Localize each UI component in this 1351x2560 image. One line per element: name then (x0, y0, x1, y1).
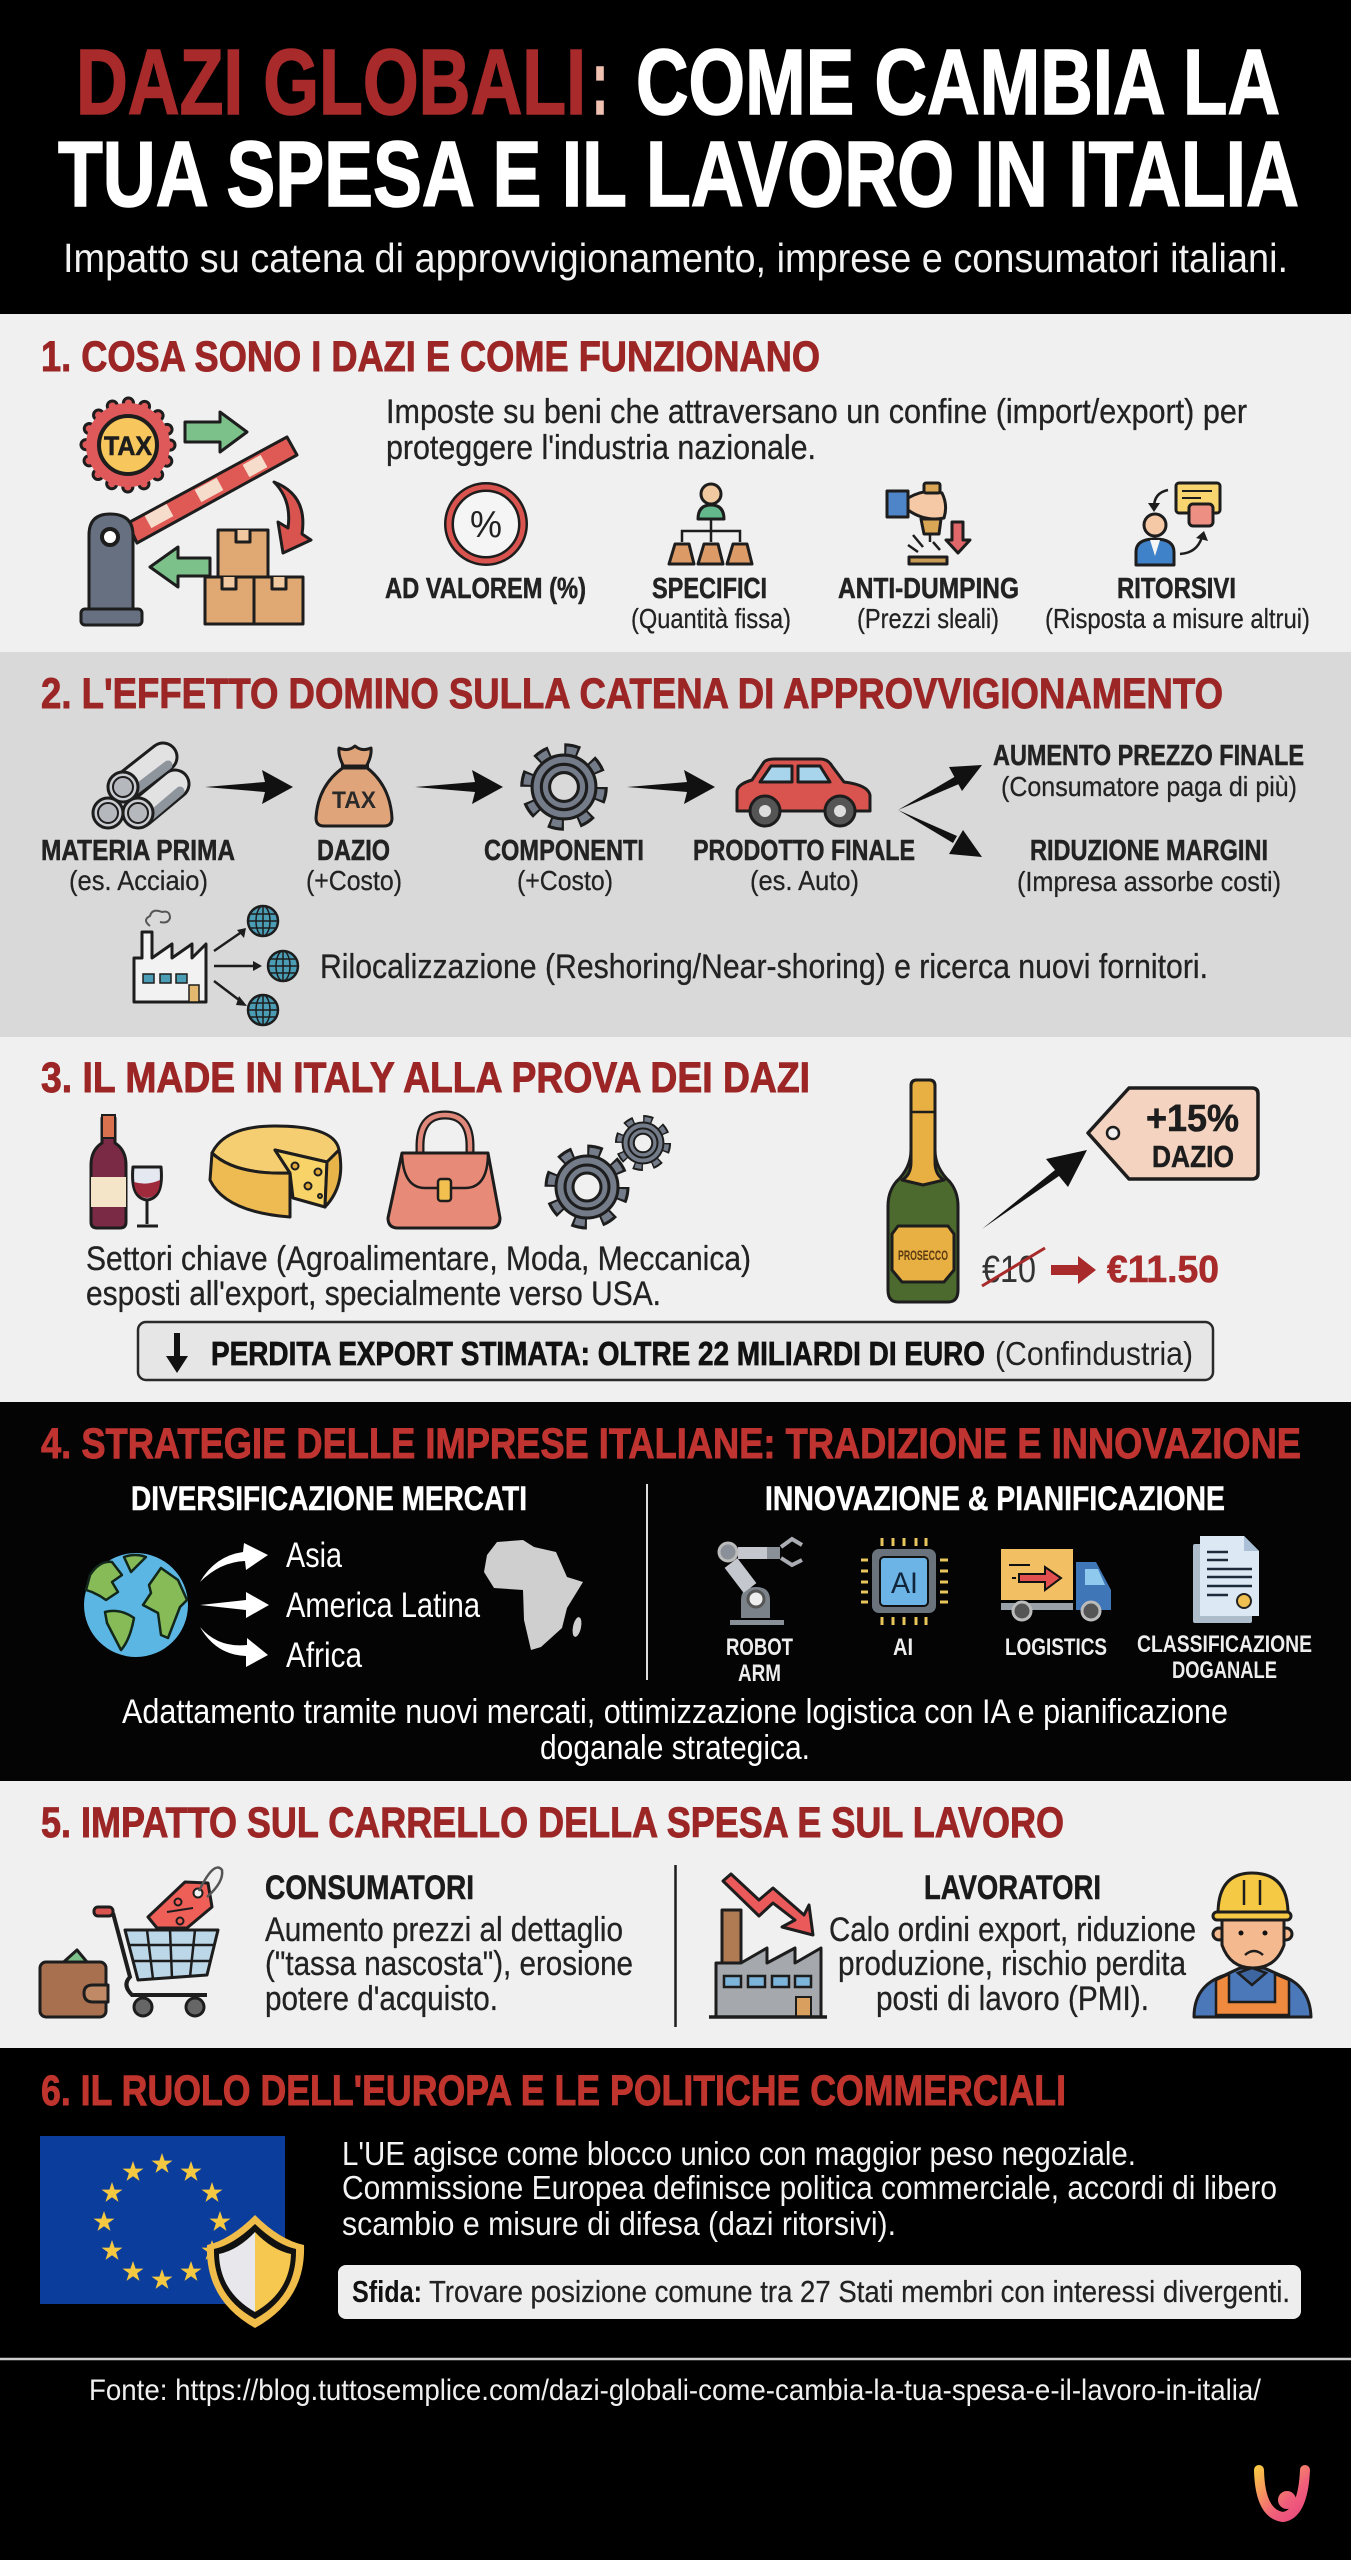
arrows: fork to outcomes (898, 765, 982, 857)
icon: gears (553, 1121, 665, 1221)
step: componenti (484, 752, 644, 896)
arrow (627, 770, 715, 804)
item: classificazione doganale (1137, 1536, 1312, 1684)
panel: section 5 carrello e lavoro (0, 1781, 1351, 2048)
lavoratori text (829, 1869, 1196, 2018)
arrows: to markets (200, 1543, 269, 1667)
item: ai chip: AI (893, 1634, 913, 1661)
outcome: aumento prezzo: (Consumatore paga di più) (1001, 771, 1297, 802)
step: dazio: (+Costo) (306, 865, 402, 896)
step: dazio: TAX (332, 787, 376, 814)
consumatori text: Aumento prezzi al dettaglio (265, 1911, 623, 1949)
markets list: Asia (286, 1536, 342, 1575)
item: anti-dumping: ANTI-DUMPING (838, 573, 1019, 605)
step: prodotto finale (693, 759, 915, 896)
panel: section 1 cosa sono i dazi (0, 314, 1351, 652)
step: materia prima (41, 757, 235, 896)
icon: globe (84, 1553, 188, 1657)
icon: eu flag with shield (40, 2136, 304, 2328)
footer source: Fonte: https://blog.tuttosemplice.com/dazi-globali-come-cambia-la-tua-spesa-e-il-lavoro-in-italia/ (89, 2374, 1262, 2407)
item: ad valorem: AD VALOREM (%) (385, 573, 586, 605)
text: ue: L'UE agisce come blocco unico con maggior peso negoziale. (342, 2135, 1136, 2172)
text: ue: scambio e misure di difesa (dazi ritorsivi). (342, 2205, 896, 2242)
arrow (415, 770, 503, 804)
icon: customs barrier with tax badge and boxes: TAX (104, 431, 152, 461)
text: adattamento: doganale strategica. (540, 1729, 810, 1767)
step: prodotto finale: PRODOTTO FINALE (693, 835, 915, 867)
price tag: DAZIO (1152, 1139, 1234, 1174)
markets list: America Latina (286, 1586, 480, 1625)
step: componenti: (+Costo) (517, 865, 613, 896)
price change: €10 (982, 1249, 1036, 1291)
item: ai chip (861, 1538, 948, 1661)
item: classificazione doganale: CLASSIFICAZIONE (1137, 1631, 1312, 1658)
panel: header (0, 0, 1351, 314)
panel: section 3 made in italy (0, 1037, 1351, 1402)
callout: sfida: Sfida: (352, 2274, 422, 2309)
price tag (1088, 1088, 1258, 1179)
heading 1: 1. COSA SONO I DAZI E COME FUNZIONANO (41, 333, 820, 381)
item: anti-dumping: (Prezzi sleali) (857, 603, 999, 634)
item: logistics truck (1001, 1549, 1111, 1661)
icon: cheese (210, 1126, 341, 1217)
outcome: aumento prezzo (993, 740, 1304, 802)
item: ritorsivi: (Risposta a misure altrui) (1045, 603, 1310, 634)
title (58, 30, 1299, 226)
text: settori chiave (86, 1240, 751, 1313)
consumatori text (265, 1869, 633, 2018)
consumatori text: potere d'acquisto. (265, 1980, 498, 2018)
outcome: riduzione margini: (Impresa assorbe costi) (1017, 866, 1281, 897)
step: componenti: COMPONENTI (484, 835, 644, 867)
callout: perdita export: (Confindustria) (995, 1335, 1193, 1372)
item: ai chip: AI (891, 1567, 918, 1600)
item: specifici: SPECIFICI (652, 573, 767, 605)
icon: wallet and cart (40, 1868, 222, 2017)
intro text (386, 393, 1247, 467)
item: robot arm: ARM (738, 1660, 781, 1687)
icon: factory with globes (134, 906, 298, 1025)
arrow (205, 770, 293, 804)
step: prodotto finale: (es. Auto) (750, 865, 859, 896)
step: dazio (306, 746, 402, 896)
text: ue: Commissione Europea definisce politica commerciale, accordi di libero (342, 2169, 1277, 2206)
icon: prosecco bottle: PROSECCO (898, 1247, 948, 1263)
subheading: diversificazione: DIVERSIFICAZIONE MERCATI (131, 1480, 527, 1518)
text: settori chiave: Settori chiave (Agroalimentare, Moda, Meccanica) (86, 1240, 751, 1278)
item: ad valorem: % (470, 504, 502, 546)
markets list (286, 1536, 480, 1675)
item: ritorsivi (1045, 483, 1310, 634)
text: rilocalizzazione: Rilocalizzazione (Reshoring/Near-shoring) e ricerca nuovi fornitori. (320, 948, 1208, 986)
lavoratori text: LAVORATORI (924, 1869, 1101, 1907)
markets list: Africa (286, 1636, 362, 1675)
outcome: riduzione margini (1017, 835, 1281, 897)
panel: section 2 effetto domino (0, 652, 1351, 1037)
icon: wine (91, 1115, 161, 1228)
lavoratori text: posti di lavoro (PMI). (876, 1980, 1149, 2018)
item: robot arm (719, 1539, 802, 1687)
callout: perdita export: PERDITA EXPORT STIMATA: OLTRE 22 MILIARDI DI EURO (211, 1335, 985, 1372)
callout: sfida (338, 2265, 1301, 2319)
text: ue (342, 2135, 1277, 2242)
title: : (592, 30, 608, 134)
item: ad valorem (385, 487, 586, 605)
panel: section 6 europa (0, 2048, 1351, 2560)
text: adattamento (122, 1693, 1228, 1767)
item: anti-dumping (838, 483, 1019, 634)
intro text: proteggere l'industria nazionale. (386, 429, 816, 467)
icon: africa map (484, 1540, 583, 1650)
panel: section 4 strategie (0, 1402, 1351, 1781)
callout: perdita export (138, 1322, 1213, 1380)
heading 6: 6. IL RUOLO DELL'EUROPA E LE POLITICHE COMMERCIALI (41, 2067, 1066, 2115)
text: settori chiave: esposti all'export, specialmente verso USA. (86, 1275, 661, 1313)
subtitle: Impatto su catena di approvvigionamento, imprese e consumatori italiani. (63, 235, 1288, 281)
text: adattamento: Adattamento tramite nuovi mercati, ottimizzazione logistica con IA e pianificazione (122, 1693, 1228, 1731)
price tag: +15% (1146, 1098, 1239, 1140)
step: materia prima: (es. Acciaio) (69, 865, 208, 896)
item: ritorsivi: RITORSIVI (1117, 573, 1236, 605)
item: specifici: (Quantità fissa) (631, 603, 791, 634)
item: robot arm: ROBOT (726, 1634, 793, 1661)
lavoratori text: Calo ordini export, riduzione (829, 1911, 1196, 1949)
lavoratori text: produzione, rischio perdita (838, 1945, 1186, 1983)
outcome: riduzione margini: RIDUZIONE MARGINI (1030, 835, 1268, 867)
consumatori text: ("tassa nascosta"), erosione (265, 1945, 633, 1983)
price change: €11.50 (1107, 1249, 1219, 1291)
heading 3: 3. IL MADE IN ITALY ALLA PROVA DEI DAZI (41, 1054, 810, 1102)
title: DAZI GLOBALI (76, 30, 586, 134)
item: logistics truck: LOGISTICS (1005, 1634, 1107, 1661)
icon: worker (1194, 1873, 1311, 2017)
heading 5: 5. IMPATTO SUL CARRELLO DELLA SPESA E SUL LAVORO (41, 1799, 1064, 1847)
subheading: innovazione: INNOVAZIONE & PIANIFICAZIONE (765, 1480, 1225, 1518)
icon: customs barrier with tax badge and boxes (81, 403, 311, 625)
intro text: Imposte su beni che attraversano un confine (import/export) per (386, 393, 1247, 431)
icon: handbag (388, 1115, 500, 1228)
step: materia prima: MATERIA PRIMA (41, 835, 235, 867)
consumatori text: CONSUMATORI (265, 1869, 474, 1907)
step: dazio: DAZIO (317, 835, 390, 867)
arrow: price rise (982, 1150, 1087, 1229)
icon: factory with falling arrow (709, 1874, 827, 2017)
item: classificazione doganale: DOGANALE (1172, 1657, 1277, 1684)
price change (982, 1248, 1219, 1291)
logo (1259, 2470, 1305, 2517)
icon: prosecco bottle (888, 1080, 958, 1302)
item: specifici (631, 484, 791, 634)
